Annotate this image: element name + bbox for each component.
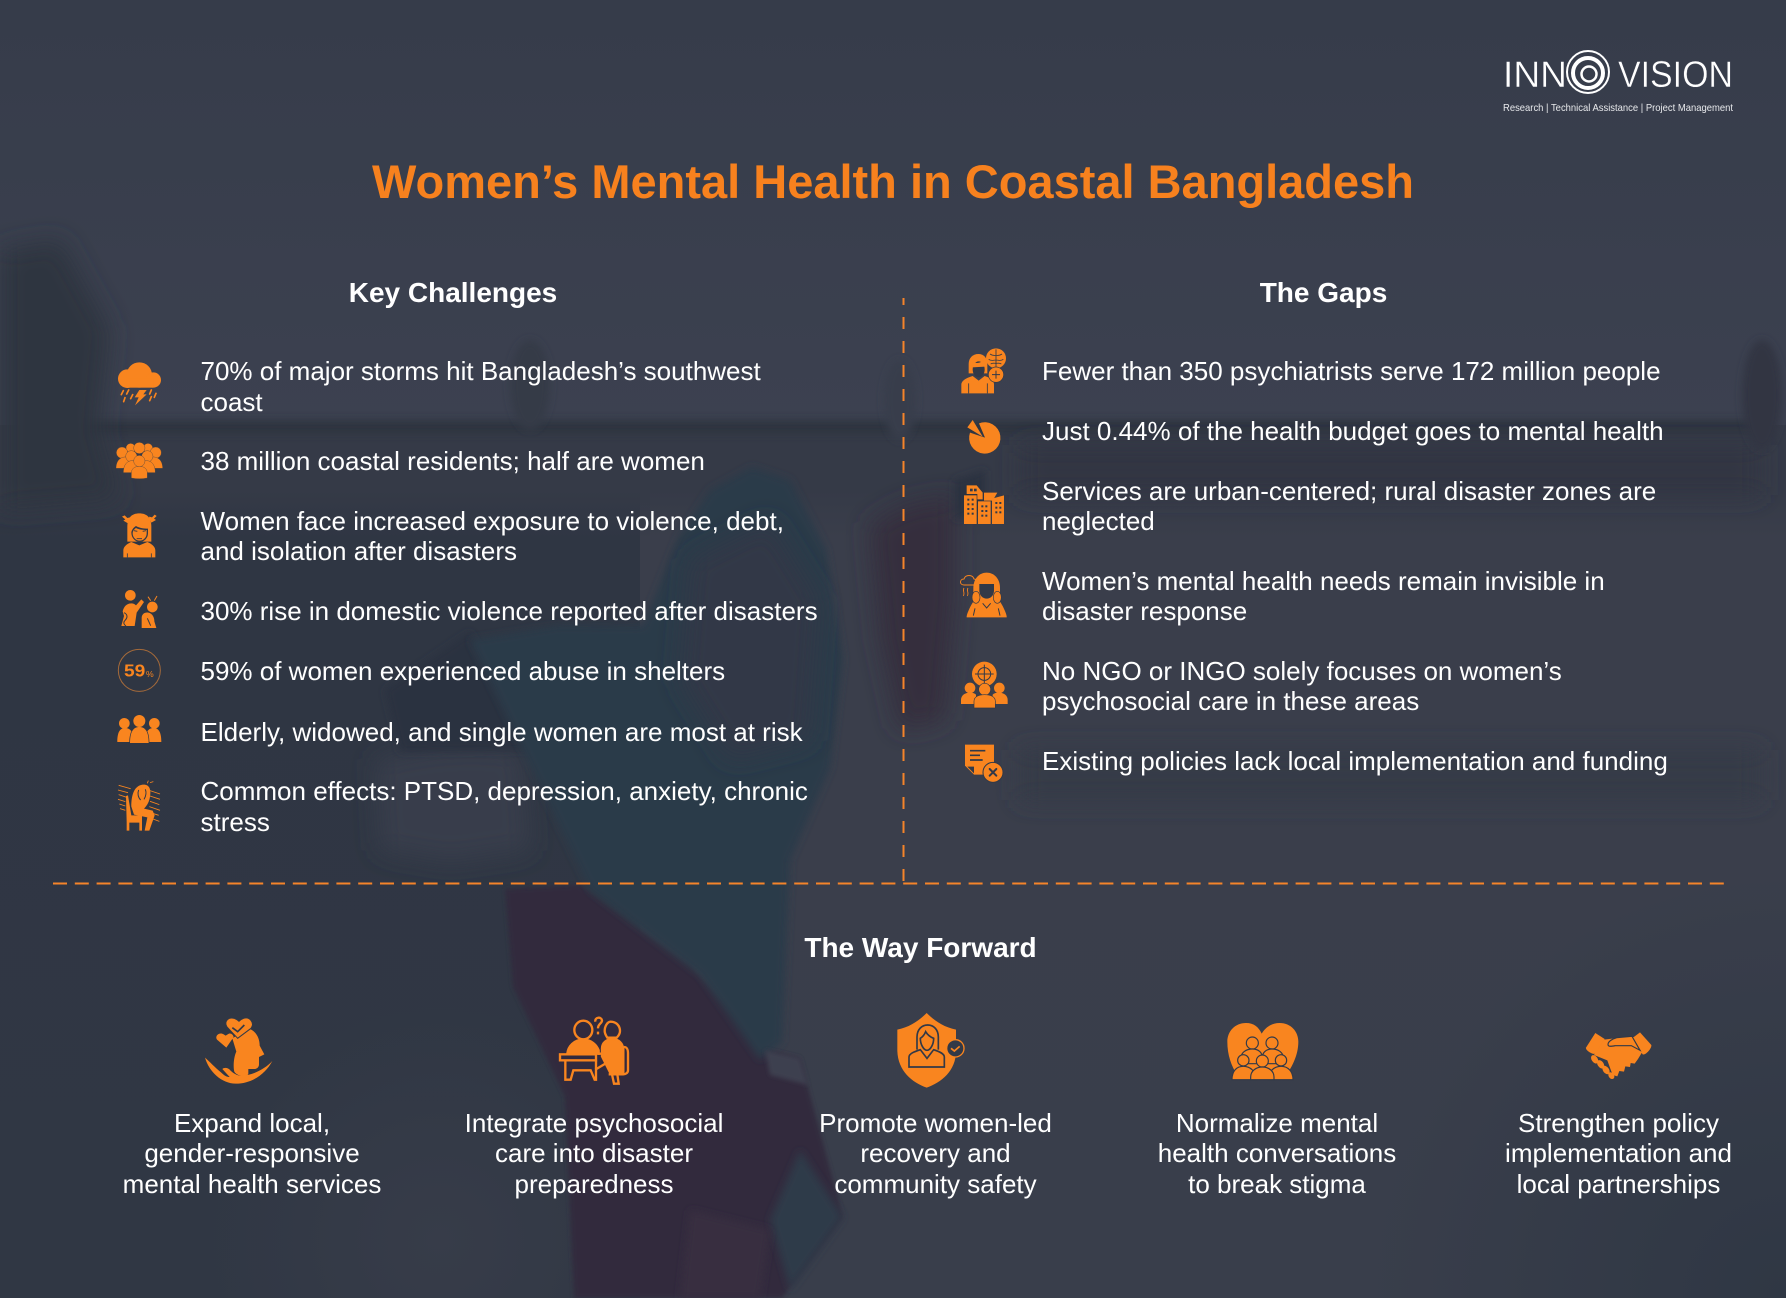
logo: Innovision: VISION xyxy=(1618,54,1733,95)
icon: woman under storm cloud xyxy=(960,573,1007,617)
way forward 3 text: community safety xyxy=(834,1168,1037,1198)
heading: The Way Forward: The Way Forward xyxy=(804,932,1037,963)
challenge 3 text: Women face increased exposure to violence, debt, xyxy=(200,506,784,536)
logo: Innovision xyxy=(1503,51,1733,114)
icon: head with hearts and caring hand xyxy=(205,1018,272,1084)
way forward 1 text: Expand local, xyxy=(174,1108,330,1138)
icon: three women xyxy=(117,715,161,743)
icon: target over community xyxy=(961,662,1008,708)
vertical dashed divider xyxy=(902,298,904,883)
icon: handshake xyxy=(1586,1032,1651,1080)
challenge 3 text: and isolation after disasters xyxy=(200,536,517,566)
way forward 2 text: preparedness xyxy=(514,1168,674,1198)
way forward 5 text: implementation and xyxy=(1505,1138,1732,1168)
logo: Innovision: INN xyxy=(1503,54,1567,95)
challenge 1 text: 70% of major storms hit Bangladesh’s southwest xyxy=(200,356,761,386)
way forward 3 text: recovery and xyxy=(860,1138,1011,1168)
second woman in distance xyxy=(869,495,955,730)
way forward 3 text: Promote women-led xyxy=(819,1108,1052,1138)
challenge 3 text xyxy=(200,506,784,566)
heading: The Gaps: The Gaps xyxy=(1260,277,1387,308)
way forward 2 text xyxy=(465,1108,723,1198)
way forward 4 text: health conversations xyxy=(1158,1138,1396,1168)
way forward 2 text: care into disaster xyxy=(495,1138,693,1168)
icon: woman on shield with check xyxy=(897,1013,964,1088)
way forward 3 text xyxy=(819,1108,1052,1198)
challenge 7 text xyxy=(200,776,808,836)
icon: pie chart xyxy=(967,420,1000,454)
gap 4 text: Women’s mental health needs remain invisible in xyxy=(1042,566,1605,596)
gap 4 text: disaster response xyxy=(1042,596,1247,626)
challenge 1 text: coast xyxy=(200,386,263,416)
way forward 1 text: gender-responsive xyxy=(144,1138,360,1168)
way forward 4 text: Normalize mental xyxy=(1176,1108,1378,1138)
gap 2 text: Just 0.44% of the health budget goes to mental health xyxy=(1042,416,1664,446)
icon: 59 percent badge: % xyxy=(146,669,154,679)
challenge 4 text: 30% rise in domestic violence reported after disasters xyxy=(200,596,818,626)
gap 6 text: Existing policies lack local implementation and funding xyxy=(1042,746,1668,776)
woman figure xyxy=(375,746,530,862)
way forward 2 text: Integrate psychosocial xyxy=(465,1108,723,1138)
icon: domestic violence xyxy=(121,590,158,628)
way forward 5 text: Strengthen policy xyxy=(1518,1108,1719,1138)
challenge 5 text: 59% of women experienced abuse in shelters xyxy=(200,656,725,686)
challenge 2 text: 38 million coastal residents; half are women xyxy=(200,446,705,476)
icon: crowd of residents xyxy=(116,442,163,479)
icon: counselling at desk xyxy=(560,1018,628,1084)
way forward 5 text: local partnerships xyxy=(1517,1168,1720,1198)
icon: family in heart xyxy=(1227,1023,1298,1080)
challenge 6 text: Elderly, widowed, and single women are most at risk xyxy=(200,717,803,747)
gap 3 text: Services are urban-centered; rural disaster zones are xyxy=(1042,476,1656,506)
gap 3 text: neglected xyxy=(1042,506,1155,536)
icon: 59 percent badge: 59 xyxy=(124,660,145,680)
gap 5 text: No NGO or INGO solely focuses on women’s xyxy=(1042,656,1562,686)
way forward 5 text xyxy=(1505,1108,1732,1198)
icon: storm cloud xyxy=(118,362,161,405)
way forward 4 text: to break stigma xyxy=(1188,1168,1366,1198)
icon: distressed woman xyxy=(122,513,157,557)
gap 5 text: psychosocial care in these areas xyxy=(1042,686,1419,716)
icon: psychiatrist with brain xyxy=(961,348,1006,393)
gap 4 text xyxy=(1042,566,1605,626)
icon: 59 percent badge xyxy=(118,649,160,691)
icon: city buildings xyxy=(964,485,1004,524)
gap 3 text xyxy=(1042,476,1656,536)
gap 1 text: Fewer than 350 psychiatrists serve 172 million people xyxy=(1042,356,1661,386)
challenge 1 text xyxy=(200,356,761,416)
way forward 1 text xyxy=(123,1108,381,1198)
challenge 7 text: stress xyxy=(200,806,270,836)
logo: Innovision: Research | Technical Assistance | Project Management xyxy=(1503,102,1733,114)
way forward 1 text: mental health services xyxy=(123,1168,381,1198)
horizontal dashed divider xyxy=(53,882,1724,884)
gap 5 text xyxy=(1042,656,1562,716)
heading: Key Challenges: Key Challenges xyxy=(349,277,557,308)
icon: policy document with cross xyxy=(965,745,1003,782)
way forward 4 text xyxy=(1158,1108,1396,1198)
icon: stressed woman on chair xyxy=(118,781,160,831)
title: Women’s Mental Health in Coastal Bangladesh xyxy=(372,155,1414,208)
challenge 7 text: Common effects: PTSD, depression, anxiety, chronic xyxy=(200,776,808,806)
